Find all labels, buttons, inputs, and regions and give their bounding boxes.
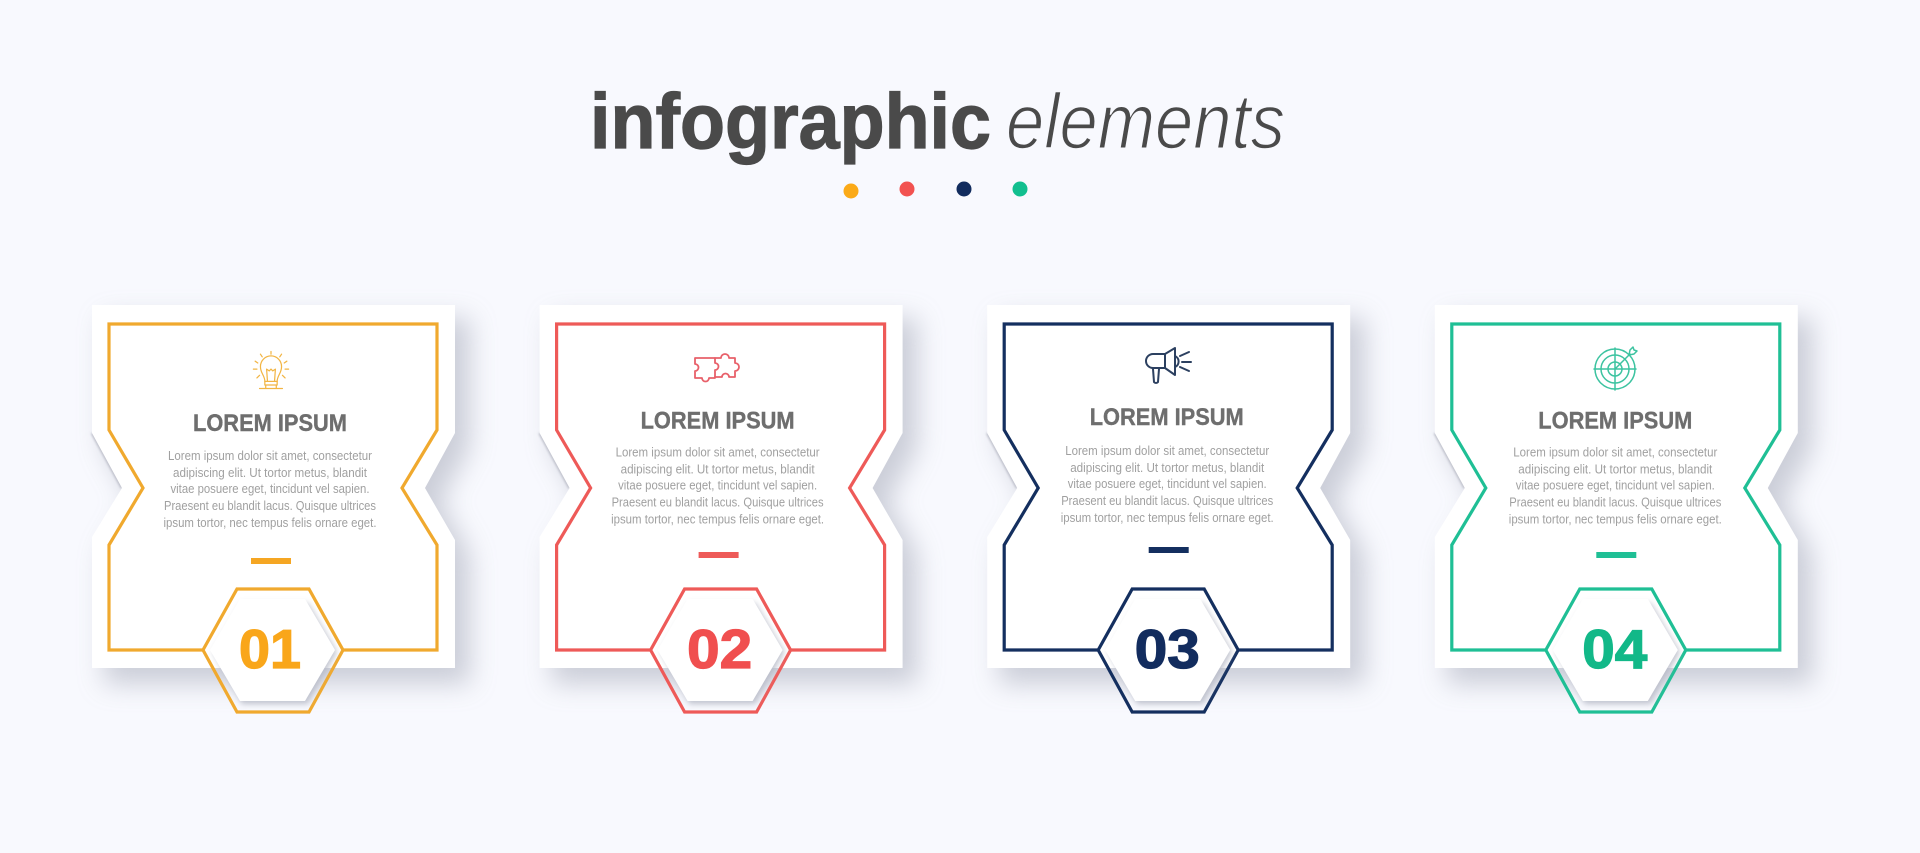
panel: card 03: [987, 305, 1365, 712]
body text: Praesent eu blandit lacus. Quisque ultrices: [1061, 493, 1274, 508]
panel: card 01: [92, 305, 470, 712]
number 02: 02: [687, 618, 752, 680]
body text: Lorem ipsum dolor sit amet, consectetur: [1065, 443, 1270, 458]
body text: [1061, 443, 1274, 525]
body text: [1509, 444, 1722, 526]
body text: ipsum tortor, nec tempus felis ornare eget.: [164, 515, 376, 530]
body text: vitae posuere eget, tincidunt vel sapien.: [618, 478, 817, 492]
heading: LOREM IPSUM: [641, 408, 795, 434]
heading: LOREM IPSUM: [1538, 408, 1692, 434]
body text: Praesent eu blandit lacus. Quisque ultrices: [1509, 494, 1722, 510]
dash: [251, 558, 291, 564]
panel: card 02: [540, 305, 918, 712]
body text: ipsum tortor, nec tempus felis ornare eget.: [1509, 512, 1722, 526]
number 03: 03: [1135, 618, 1200, 680]
body text: vitae posuere eget, tincidunt vel sapien.: [1516, 478, 1715, 492]
body text: ipsum tortor, nec tempus felis ornare eget.: [611, 512, 824, 526]
body text: Lorem ipsum dolor sit amet, consectetur: [1513, 444, 1718, 460]
icon: target: [1594, 347, 1637, 390]
body text: Praesent eu blandit lacus. Quisque ultrices: [164, 498, 376, 513]
icon: light bulb: [253, 352, 289, 388]
body text: adipiscing elit. Ut tortor metus, blandit: [1518, 462, 1713, 476]
body text: [611, 444, 824, 526]
body text: Lorem ipsum dolor sit amet, consectetur: [168, 448, 373, 463]
title: elements: [1006, 77, 1285, 165]
number 04: 04: [1582, 618, 1648, 680]
body text: Lorem ipsum dolor sit amet, consectetur: [616, 444, 820, 460]
heading: LOREM IPSUM: [1090, 404, 1244, 431]
body text: [164, 448, 376, 530]
color dots: [844, 182, 1028, 198]
body text: adipiscing elit. Ut tortor metus, blandit: [173, 465, 367, 480]
number 01: 01: [239, 618, 301, 680]
dash: [1149, 547, 1189, 553]
body text: adipiscing elit. Ut tortor metus, blandit: [1070, 460, 1264, 475]
icon: puzzle: [695, 354, 739, 382]
icon: megaphone: [1146, 348, 1191, 383]
title: infographic: [590, 77, 991, 165]
body text: vitae posuere eget, tincidunt vel sapien.: [1068, 476, 1267, 491]
dash: [699, 552, 739, 558]
dash: [1596, 552, 1636, 558]
panel: card 04: [1435, 305, 1813, 712]
heading: LOREM IPSUM: [193, 410, 347, 437]
body text: Praesent eu blandit lacus. Quisque ultrices: [612, 494, 824, 510]
title: [590, 77, 1285, 165]
body text: vitae posuere eget, tincidunt vel sapien.: [170, 481, 370, 496]
body text: adipiscing elit. Ut tortor metus, blandit: [621, 462, 815, 476]
body text: ipsum tortor, nec tempus felis ornare eget.: [1061, 510, 1274, 525]
